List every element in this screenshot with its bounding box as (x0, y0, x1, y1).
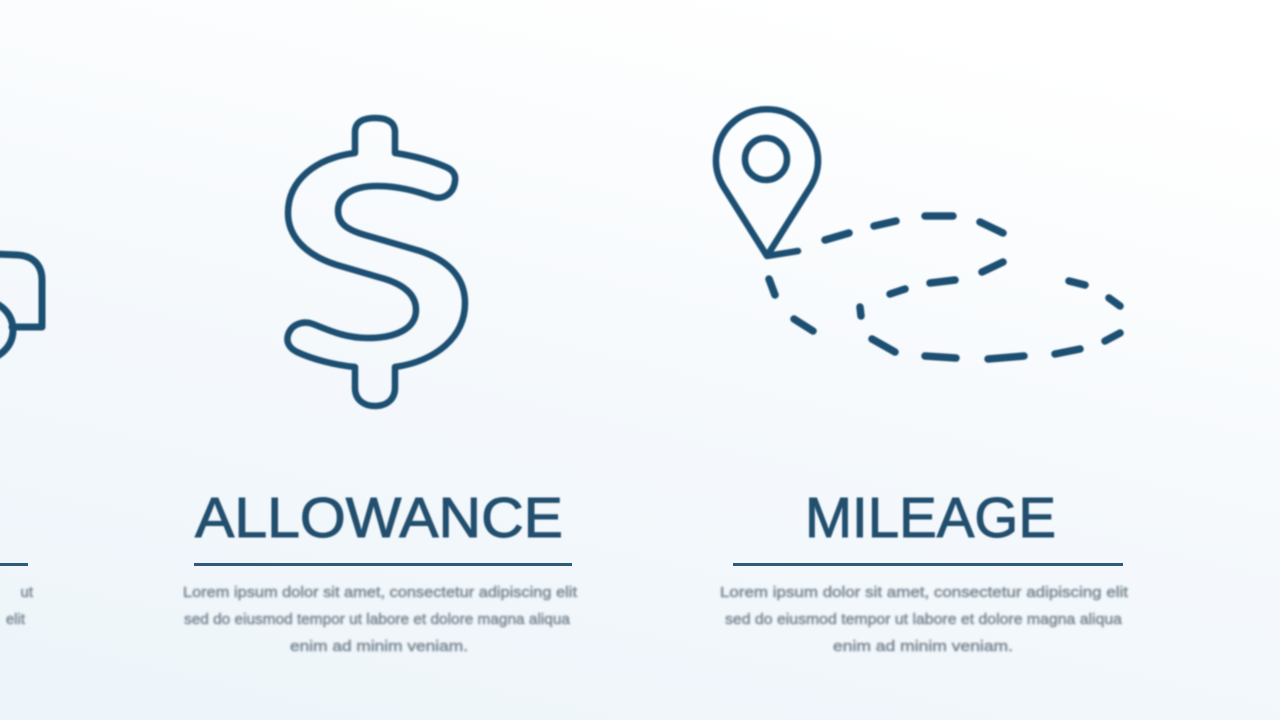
panel: cropped left column (0, 254, 42, 628)
cropped description: elit (6, 611, 26, 628)
description: mileage: sed do eiusmod tempor ut labore et dolore magna aliqua (725, 611, 1123, 628)
description: allowance: Lorem ipsum dolor sit amet, consectetur adipiscing elit (183, 584, 578, 601)
description: allowance (183, 584, 578, 655)
description: allowance: sed do eiusmod tempor ut labore et dolore magna aliqua (184, 611, 571, 628)
cropped description (6, 584, 34, 628)
panel: allowance (183, 118, 578, 655)
icon: cropped car (0, 254, 42, 359)
heading: mileage: MILEAGE (805, 486, 1056, 550)
description: mileage: enim ad minim veniam. (833, 638, 1013, 655)
description: mileage: Lorem ipsum dolor sit amet, consectetur adipiscing elit (720, 584, 1129, 601)
icon: location pin with dashed route (716, 109, 1120, 359)
panel: mileage (716, 109, 1129, 655)
divider: mileage (733, 563, 1123, 566)
divider: allowance (194, 563, 572, 566)
cropped description: ut (20, 584, 34, 601)
cropped divider (0, 563, 28, 566)
heading: allowance: ALLOWANCE (195, 486, 563, 550)
description: allowance: enim ad minim veniam. (290, 638, 468, 655)
icon: dollar sign (287, 118, 465, 406)
description: mileage (720, 584, 1129, 655)
